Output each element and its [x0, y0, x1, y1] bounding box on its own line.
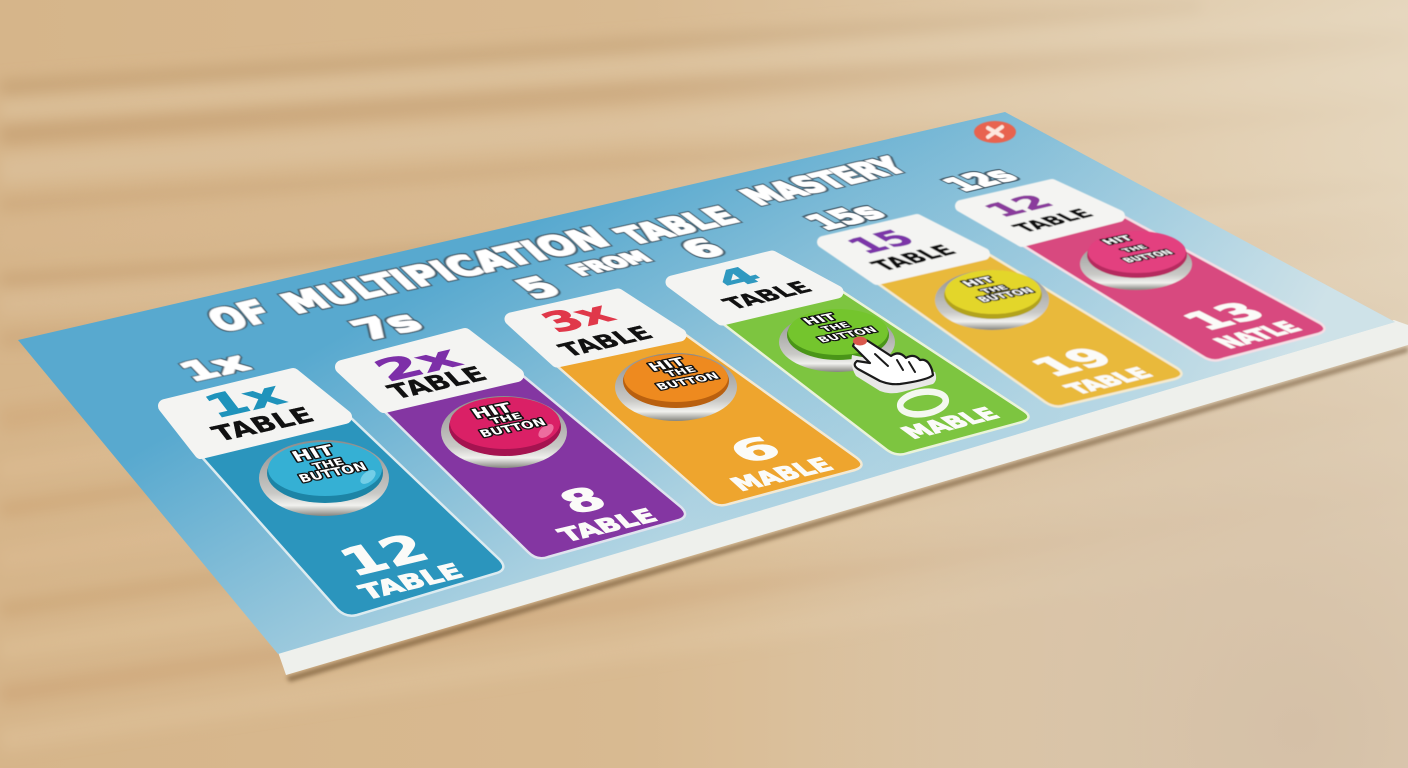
header: white label	[165, 375, 345, 452]
header: white label	[511, 295, 680, 361]
value: 8: 8	[550, 480, 617, 521]
panel: 2x table	[342, 335, 685, 558]
button: hit the button: HIT	[288, 442, 339, 465]
column label: 5 from 6: FROM	[564, 248, 658, 280]
button: hit the button	[441, 396, 567, 468]
header: white label	[823, 220, 984, 279]
value: 19: 19	[1021, 343, 1126, 382]
button: hit the button: BUTTON	[815, 325, 880, 345]
badge: red multiplication logo	[974, 121, 1016, 143]
caption: MABLE: MABLE	[895, 404, 1006, 443]
title: MASTERY	[731, 152, 917, 210]
button: hit the button	[259, 440, 389, 516]
button: hit the button: BUTTON	[654, 371, 722, 392]
column label: 5 from 6: 6	[670, 233, 735, 264]
panel: 15 table	[823, 220, 1182, 406]
value: 12: 12	[330, 526, 438, 585]
button: hit the button: HIT	[1099, 234, 1137, 246]
button: hit the button: THE	[1119, 244, 1150, 253]
panel: 1x table	[165, 375, 503, 616]
panel: 4x table	[672, 257, 1029, 454]
value: 13: 13	[1172, 297, 1279, 336]
caption: MABLE: MABLE	[724, 453, 839, 495]
column label: 1x: 1x	[171, 347, 258, 387]
panel: 3x table	[511, 295, 862, 505]
icon: pointing hand cursor	[852, 336, 936, 393]
heading: 4: 4	[704, 261, 772, 293]
button: hit the button: HIT	[799, 311, 841, 327]
column label: 5 from 6	[506, 233, 735, 305]
button: hit the button	[1080, 231, 1192, 290]
board blue face	[18, 112, 1395, 654]
button: hit the button	[935, 270, 1049, 330]
button: hit the button: HIT	[468, 399, 517, 422]
button: hit the button: HIT	[645, 356, 690, 374]
column label: 12s: 12s	[935, 165, 1027, 196]
heading: TABLE: TABLE	[865, 242, 964, 274]
button: hit the button: THE	[979, 285, 1012, 295]
button: hit the button: THE	[310, 456, 347, 472]
panel: 12 table	[961, 185, 1325, 360]
value: 0	[899, 389, 947, 417]
header: white label	[342, 335, 517, 406]
board	[18, 112, 1408, 675]
column label: 5 from 6: 5	[506, 271, 571, 305]
board white lower edge	[278, 320, 1408, 675]
button: hit the button: HIT	[958, 275, 1000, 289]
title: MULTIPICATION	[273, 222, 619, 320]
column label: 15s: 15s	[796, 199, 895, 235]
button: hit the button: THE	[819, 321, 853, 334]
heading: 2x: 2x	[365, 340, 470, 388]
heading: 3x: 3x	[532, 296, 624, 339]
button: hit the button	[779, 309, 895, 372]
heading: TABLE: TABLE	[382, 363, 494, 404]
button: hit the button: BUTTON	[974, 286, 1038, 304]
button: hit the button: BUTTON	[477, 416, 549, 440]
heading: TABLE: TABLE	[717, 278, 819, 313]
caption: TABLE: TABLE	[354, 559, 468, 604]
title	[199, 152, 917, 339]
header: white label	[672, 257, 837, 319]
heading: 12: 12	[975, 191, 1064, 221]
heading: TABLE: TABLE	[552, 322, 659, 361]
button: hit the button: BUTTON	[296, 460, 370, 486]
heading: 1x: 1x	[196, 376, 294, 426]
header: white label	[961, 185, 1119, 241]
column label: 7s: 7s	[343, 306, 432, 347]
heading: 15: 15	[837, 225, 925, 259]
button: hit the button: THE	[489, 412, 525, 426]
caption: NATLE: NATLE	[1206, 318, 1309, 352]
heading: TABLE: TABLE	[207, 403, 320, 447]
value: 6: 6	[719, 431, 792, 470]
title: OF	[199, 294, 281, 339]
board shadow	[286, 347, 1408, 682]
caption: TABLE: TABLE	[1059, 365, 1160, 398]
button: hit the button: BUTTON	[1120, 249, 1177, 264]
caption: TABLE: TABLE	[553, 504, 663, 546]
button: hit the button	[615, 353, 737, 421]
heading: TABLE: TABLE	[1007, 206, 1100, 235]
button: hit the button: THE	[664, 365, 699, 379]
title: TABLE	[607, 202, 748, 250]
